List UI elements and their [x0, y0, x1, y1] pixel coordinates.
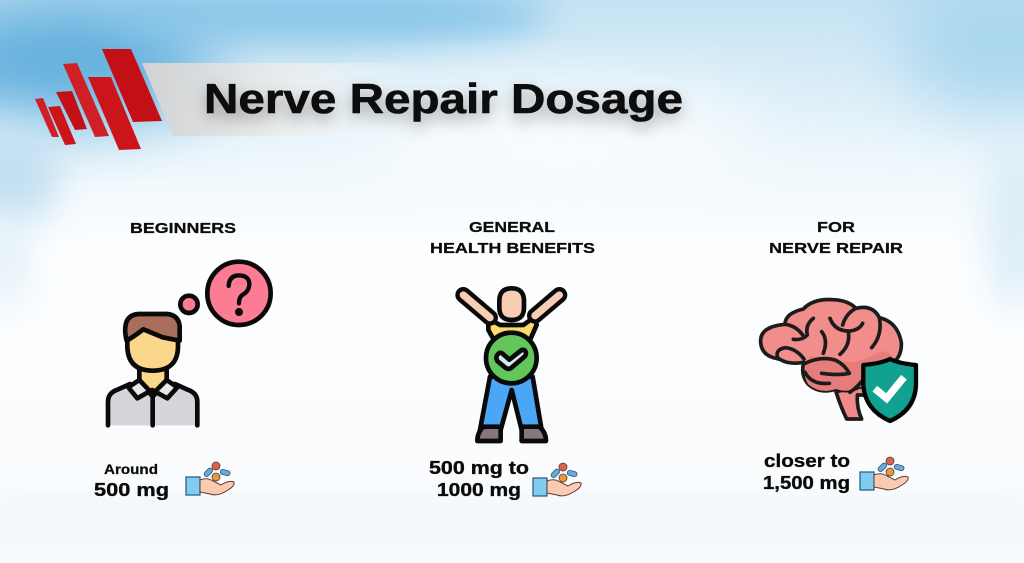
heading: general health benefits	[430, 219, 595, 257]
dose: closer to 1,500 mg: 1,500 mg	[763, 473, 850, 493]
heading: for nerve repair: FOR	[817, 219, 855, 236]
icon: hand with pills	[533, 463, 581, 496]
dose: 500 mg to 1000 mg: 1000 mg	[437, 480, 521, 500]
column 1: beginners	[94, 220, 271, 500]
logo: red slanted bars	[35, 49, 162, 150]
heading: for nerve repair: NERVE REPAIR	[769, 240, 903, 257]
heading: general health benefits: HEALTH BENEFITS	[430, 240, 595, 257]
column 2: general health benefits	[429, 219, 595, 500]
dose: around 500 mg: Around	[104, 462, 158, 477]
heading: for nerve repair	[769, 219, 903, 257]
title banner: grey fading band	[142, 63, 420, 136]
heading: general health benefits: GENERAL	[469, 219, 555, 236]
heading: beginners: BEGINNERS	[130, 220, 236, 237]
dose: 500 mg to 1000 mg: 500 mg to	[429, 458, 529, 478]
icon: person thinking with question mark	[108, 262, 271, 425]
icon: happy person with green check	[463, 288, 559, 441]
icon: hand with pills	[186, 462, 234, 495]
dose: around 500 mg	[94, 462, 169, 500]
icon: hand with pills	[860, 457, 908, 490]
dose: around 500 mg: 500 mg	[94, 480, 169, 500]
dose: 500 mg to 1000 mg	[429, 458, 529, 500]
title: Nerve Repair Dosage	[204, 75, 683, 122]
dose: closer to 1,500 mg	[763, 451, 850, 493]
column 3: for nerve repair	[761, 219, 916, 493]
dose: closer to 1,500 mg: closer to	[764, 451, 850, 471]
icon: brain with shield	[761, 300, 916, 421]
